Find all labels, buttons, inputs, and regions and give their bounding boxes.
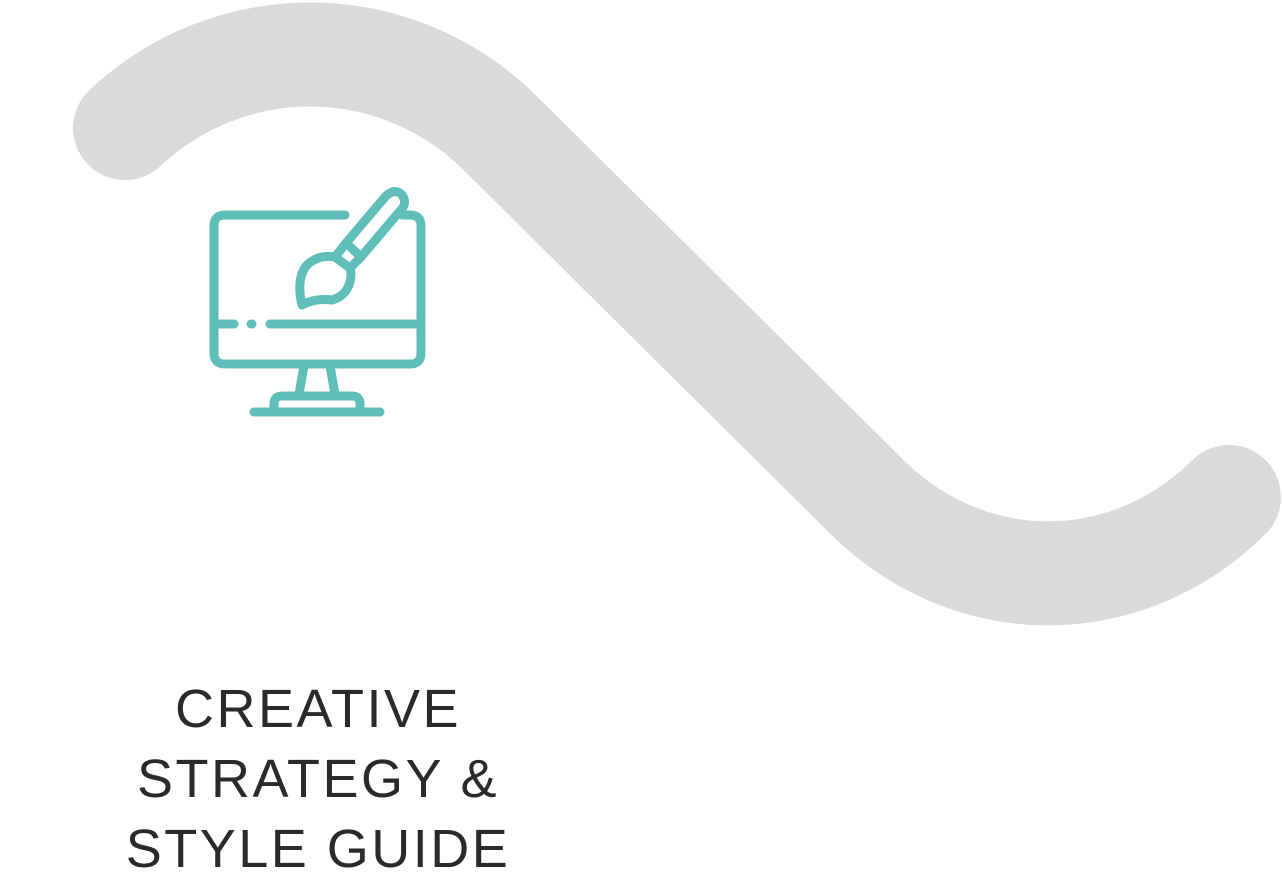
decorative wave path [125, 54, 1229, 573]
icon: monitor with paintbrush [214, 191, 421, 412]
title: STYLE GUIDE [126, 819, 510, 879]
title: STRATEGY & [137, 749, 499, 809]
title: CREATIVE [175, 679, 461, 739]
title [126, 679, 510, 879]
